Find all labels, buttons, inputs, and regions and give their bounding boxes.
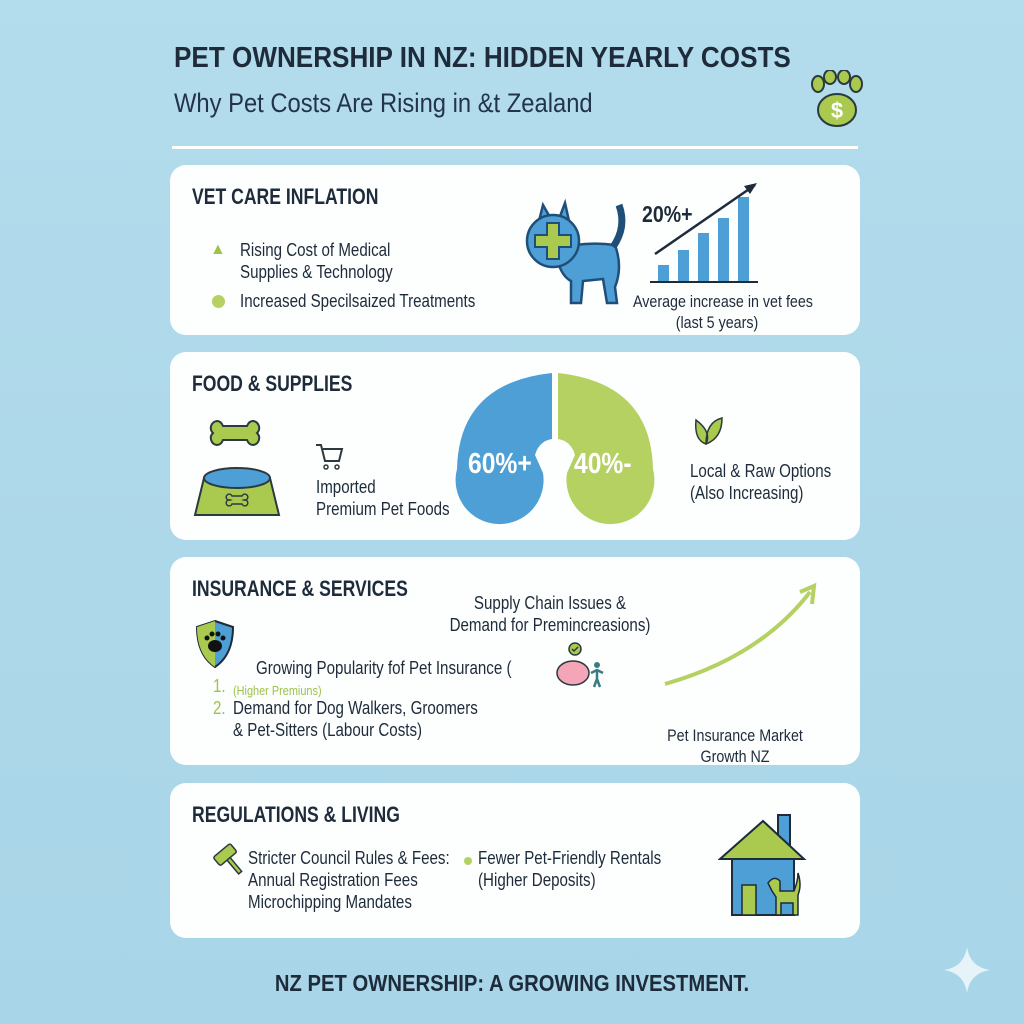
list: insurance items: & Pet-Sitters (Labour Costs) — [233, 720, 422, 740]
list: insurance items: 2. — [213, 698, 226, 718]
label: local: (Also Increasing) — [690, 483, 803, 503]
caption — [633, 292, 813, 332]
panel: insurance — [170, 557, 860, 765]
bullet: treatments: Increased Specilsaized Treatments — [240, 291, 475, 311]
icon: house with dog — [718, 814, 806, 916]
text: rentals — [478, 848, 661, 890]
text: council rules: Annual Registration Fees — [248, 870, 418, 890]
icon: bowl — [194, 467, 280, 516]
heading: INSURANCE & SERVICES — [192, 576, 408, 601]
stat 20%: 20%+ — [642, 201, 693, 227]
panel: food — [170, 352, 860, 540]
label: local: Local & Raw Options — [690, 461, 831, 481]
list: insurance items: Demand for Dog Walkers, Groomers — [233, 698, 478, 718]
list: insurance items: Growing Popularity fof Pet Insurance ( — [256, 658, 511, 678]
bullet dot — [464, 857, 472, 865]
caption: market growth: Growth NZ — [700, 747, 770, 766]
subtitle: Why Pet Costs Are Rising in &t Zealand — [174, 88, 593, 118]
title: PET OWNERSHIP IN NZ: HIDDEN YEARLY COSTS — [174, 42, 791, 74]
icon: leaf — [694, 417, 723, 446]
stat 60: 60%+ — [468, 448, 532, 480]
icon: sparkle — [944, 948, 990, 992]
text: council rules: Stricter Council Rules & Fees: — [248, 848, 450, 868]
bullet: rising cost: ▲ — [210, 241, 226, 258]
label: imported — [316, 477, 450, 519]
list: insurance items: 1. — [213, 676, 226, 696]
icon: gavel — [213, 844, 243, 875]
icon: paw dollar — [811, 70, 863, 127]
list: insurance items: (Higher Premiuns) — [233, 683, 322, 698]
bullet: rising cost: Rising Cost of Medical — [240, 240, 390, 260]
chart: bars — [650, 183, 758, 283]
text: council rules: Microchipping Mandates — [248, 892, 412, 912]
text: supply chain: Demand for Premincreasions) — [450, 615, 650, 635]
text: supply chain: Supply Chain Issues & — [474, 593, 626, 613]
bullet: rising cost: Supplies & Technology — [240, 262, 393, 282]
icon: cat with cross — [526, 198, 626, 304]
heading: FOOD & SUPPLIES — [192, 371, 352, 396]
heading: REGULATIONS & LIVING — [192, 802, 400, 827]
text: rentals: Fewer Pet-Friendly Rentals — [478, 848, 661, 868]
bullet: rising cost — [210, 240, 393, 282]
text: supply chain — [450, 593, 650, 635]
chart: growth arrow — [664, 582, 816, 686]
icon: piggy bank — [556, 642, 604, 688]
icon: shield — [196, 620, 234, 668]
label: imported: Premium Pet Foods — [316, 499, 450, 519]
footer: NZ PET OWNERSHIP: A GROWING INVESTMENT. — [275, 970, 749, 996]
caption: (last 5 years) — [676, 313, 758, 332]
chart: split shape — [456, 373, 654, 524]
label: local — [690, 461, 831, 503]
icon: paw dollar: $ — [831, 98, 843, 123]
panel: regulations — [170, 783, 860, 938]
caption: market growth: Pet Insurance Market — [667, 726, 803, 745]
caption: Average increase in vet fees — [633, 292, 813, 311]
icon: cart — [316, 444, 344, 470]
text: council rules — [248, 848, 450, 912]
label: imported: Imported — [316, 477, 376, 497]
list: insurance items — [213, 658, 512, 740]
heading: VET CARE INFLATION — [192, 184, 378, 209]
icon: bone — [210, 420, 260, 446]
caption: market growth — [667, 726, 803, 766]
text: rentals: (Higher Deposits) — [478, 870, 596, 890]
stat 40: 40%- — [574, 448, 632, 480]
panel: vet care — [170, 165, 860, 335]
